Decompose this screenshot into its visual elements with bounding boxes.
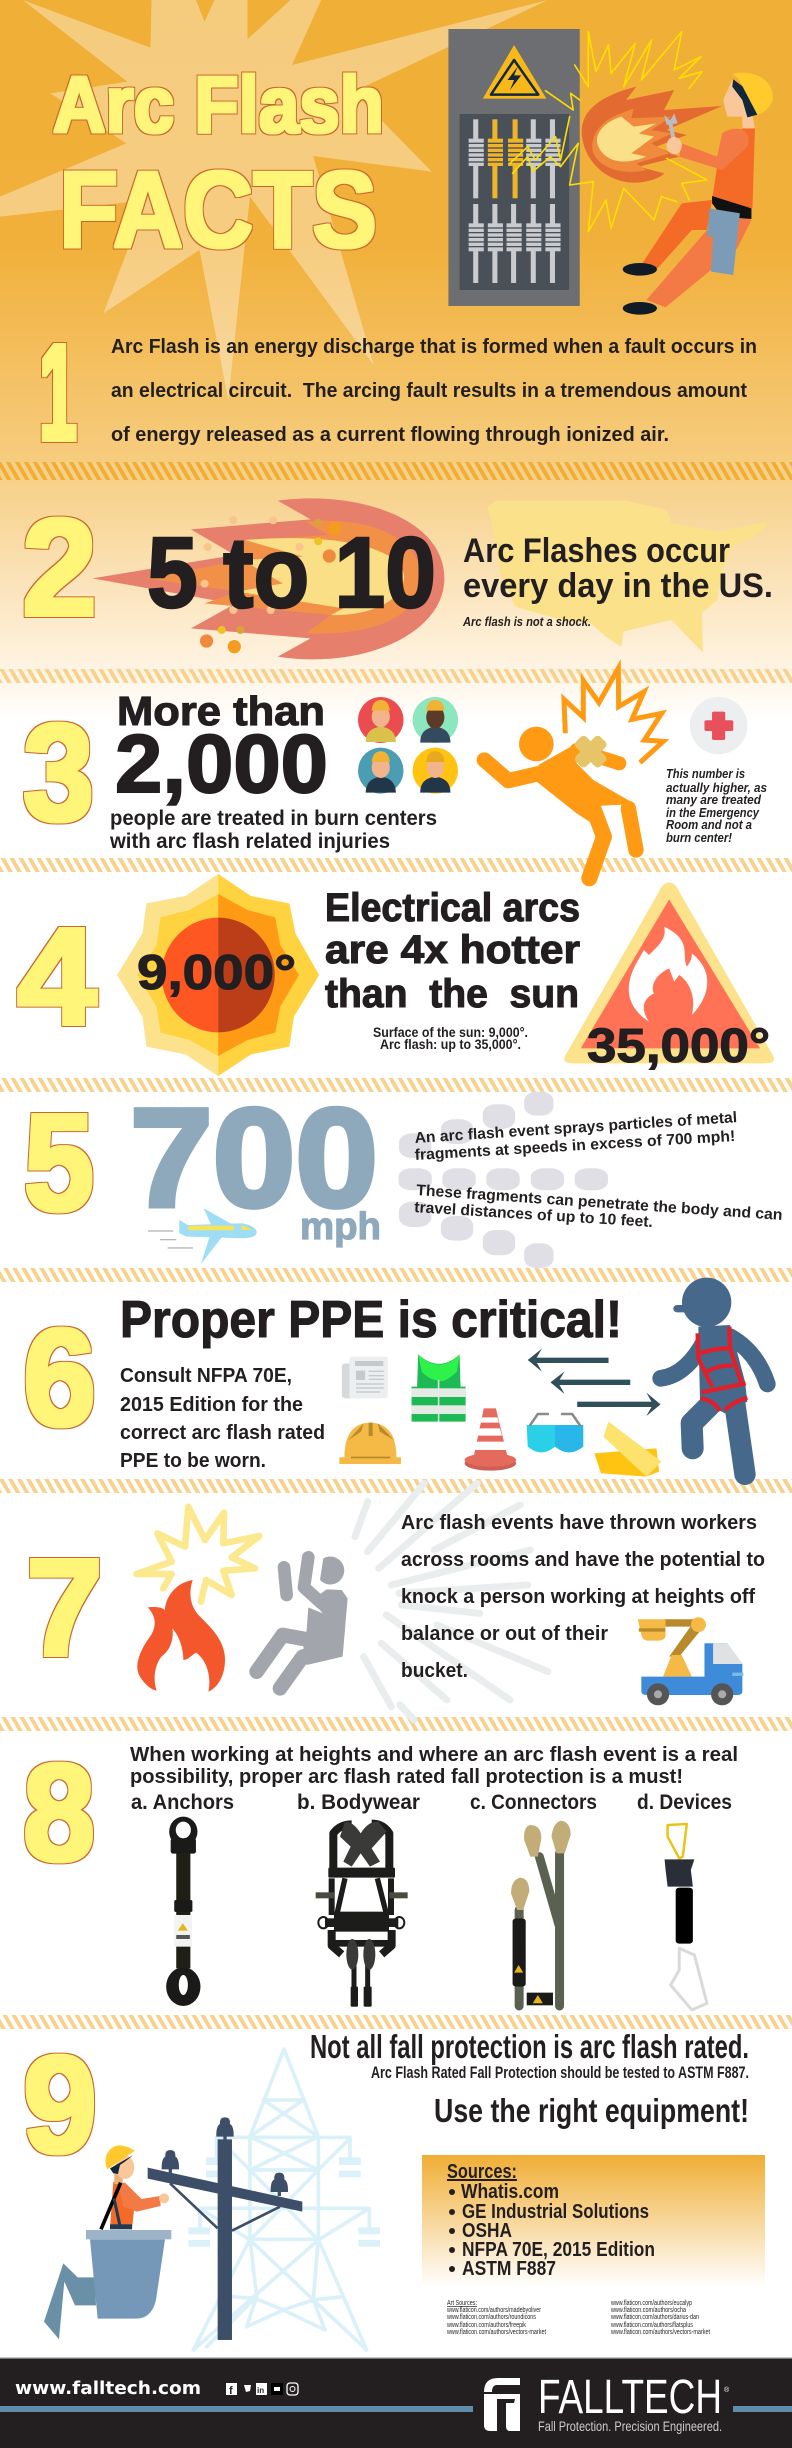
fact 7 text: knock a person working at heights off — [401, 1586, 755, 1608]
switches — [469, 119, 561, 283]
art sources: www.flaticon.com/authors/roundicons — [446, 2314, 536, 2321]
icon: warning triangle — [483, 45, 546, 99]
number 4: 4 — [17, 900, 97, 1054]
number 9: 9 — [23, 2028, 97, 2182]
icon: sun — [117, 874, 319, 1076]
fact 5 text: These fragments can penetrate the body and can — [416, 1182, 783, 1224]
icon: injured person — [484, 662, 668, 878]
panel: sources: GE Industrial Solutions — [462, 2201, 649, 2223]
icon: transmission tower — [188, 2049, 380, 2350]
speed statistic: mph — [300, 1206, 381, 1248]
fact 3 text: 2,000 — [115, 717, 328, 810]
side note — [666, 766, 767, 845]
icon: worker in bucket — [44, 2145, 171, 2339]
title: Arc Flash — [53, 60, 384, 149]
impact rays — [355, 1483, 548, 1720]
sun temperature: 9,000° — [137, 946, 296, 1000]
side note: many are treated — [666, 792, 762, 807]
footer — [0, 2357, 792, 2448]
icon: anchor strap — [166, 1817, 200, 2006]
equipment labels: b. Bodywear — [297, 1791, 420, 1814]
fact 7 text: bucket. — [401, 1660, 468, 1682]
fact 6 text — [120, 1291, 622, 1472]
fact 6 text: correct arc flash rated — [120, 1422, 325, 1444]
fact 4 text: are 4x hotter — [325, 928, 580, 972]
fact 2 text — [462, 532, 773, 629]
equipment labels: c. Connectors — [470, 1791, 597, 1814]
social icons: f — [229, 2385, 233, 2397]
number 6: 6 — [23, 1301, 96, 1455]
fact 6 text: PPE to be worn. — [120, 1450, 266, 1472]
fact 8 text: possibility, proper arc flash rated fall protection is a must! — [130, 1766, 683, 1788]
side note: This number is — [666, 766, 745, 781]
icon: utility pole — [148, 2117, 302, 2340]
icon: red cross — [690, 697, 747, 754]
art sources: Art Sources: — [447, 2300, 477, 2307]
art sources: www.flaticon.com/authors/vectors-market — [610, 2329, 710, 2336]
map of the US — [487, 501, 768, 653]
fact 1 text — [111, 336, 757, 446]
fact 6 text: Consult NFPA 70E, — [120, 1365, 292, 1387]
icon: thrown worker — [257, 1556, 348, 1688]
side note: in the Emergency — [666, 805, 760, 820]
statistic: 5 to 10: 5 to 10 — [147, 517, 436, 629]
equipment labels: d. Devices — [637, 1791, 732, 1814]
icon: fire warning triangle — [564, 883, 774, 1063]
equipment labels: a. Anchors — [131, 1791, 234, 1814]
logo wordmark — [538, 2371, 730, 2434]
icon: worker in harness — [661, 1278, 767, 1474]
title — [53, 60, 384, 271]
fact 8 text: When working at heights and where an arc flash event is a real — [130, 1744, 738, 1766]
social icons — [226, 2383, 298, 2397]
fact 1 text: Arc Flash is an energy discharge that is formed when a fault occurs in — [111, 336, 757, 358]
website: www.falltech.com — [15, 2378, 201, 2399]
speed statistic: 700 — [130, 1079, 378, 1236]
logo wordmark: ® — [724, 2386, 730, 2394]
fact 3 text — [109, 688, 437, 853]
icon: fall device — [665, 1824, 707, 2010]
icons: PPE equipment — [339, 1354, 662, 1477]
equipment labels — [131, 1791, 732, 1814]
logo wordmark: Fall Protection. Precision Engineered. — [538, 2418, 722, 2434]
art sources: www.flaticon.com/authors/ocha — [610, 2307, 686, 2314]
arc flash flame and lightning — [510, 32, 722, 232]
side note: Room and not a — [666, 817, 752, 832]
icon: harness — [316, 1822, 408, 2007]
fact 4 text: than the sun — [325, 972, 579, 1016]
fact 7 text — [401, 1512, 765, 1682]
fact 6 text: 2015 Edition for the — [120, 1394, 303, 1416]
icon: flame — [137, 1580, 225, 1692]
fact 2 text: Arc flash is not a shock. — [462, 614, 591, 629]
panel: sources: OSHA — [462, 2220, 512, 2242]
fact 4 text: Electrical arcs — [325, 886, 580, 930]
panel: sources — [422, 2155, 765, 2287]
fact 7 text: across rooms and have the potential to — [401, 1549, 765, 1571]
logo wordmark: FALLTECH — [538, 2371, 722, 2424]
number 7: 7 — [26, 1531, 103, 1685]
particle dots — [398, 1092, 608, 1268]
fact 9 text — [310, 2028, 749, 2129]
fact 4 text — [325, 886, 580, 1052]
art sources — [446, 2300, 710, 2336]
logo mark — [484, 2378, 520, 2431]
fact 5 text — [414, 1109, 783, 1231]
fact 2 text: Arc Flashes occur — [463, 532, 730, 570]
fact 8 text — [130, 1744, 738, 1788]
panel: sources: ASTM F887 — [462, 2258, 556, 2280]
arc flash temperature: 35,000° — [587, 1020, 770, 1073]
fact 5 text: fragments at speeds in excess of 700 mph! — [414, 1128, 736, 1164]
fact 3 text: More than — [117, 688, 325, 734]
fact 5 text: travel distances of up to 10 feet. — [414, 1199, 653, 1231]
fact 7 text: balance or out of their — [401, 1623, 608, 1645]
electrician worker — [623, 73, 773, 315]
art sources: www.flaticon.com/authors/freepik — [446, 2322, 526, 2329]
fact 4 text: Surface of the sun: 9,000°. — [373, 1024, 528, 1040]
icon: connector lanyard — [511, 1821, 571, 2006]
icon: four workers — [358, 697, 458, 794]
art sources: www.flaticon.com/authors/darius-dan — [610, 2314, 699, 2321]
fact 4 text: Arc flash: up to 35,000°. — [380, 1036, 521, 1052]
art sources: www.flaticon.com/authors/madebyoliver — [446, 2307, 542, 2314]
art sources: www.flaticon.com/authors/flatsplus — [610, 2322, 693, 2329]
social icons: in — [257, 2386, 264, 2395]
starburst — [0, 0, 548, 400]
text: 1 — [40, 316, 76, 470]
icon: airplane — [148, 1208, 257, 1264]
icon: explosion burst — [137, 1507, 259, 1602]
icon: fireball — [92, 498, 444, 659]
art sources: www.flaticon.com/authors/eucalyp — [610, 2300, 692, 2307]
fact 5 text: An arc flash event sprays particles of metal — [414, 1109, 738, 1147]
fact 2 text: every day in the US. — [463, 567, 773, 605]
side note: burn center! — [666, 830, 733, 845]
panel: sources: Sources: — [447, 2161, 517, 2183]
fact 1 text: of energy released as a current flowing through ionized air. — [111, 424, 669, 446]
stripe dividers — [0, 462, 792, 2029]
fact 1 text: an electrical circuit. The arcing fault results in a tremendous amount — [111, 380, 747, 402]
fact 3 text: with arc flash related injuries — [109, 830, 390, 853]
number 2: 2 — [22, 491, 97, 645]
arrows — [528, 1349, 661, 1416]
icon: bucket truck — [638, 1617, 743, 1705]
electrical panel — [448, 29, 580, 306]
art sources: www.flaticon.com/authors/vectors-market — [446, 2329, 546, 2336]
panel: sources: Whatis.com — [461, 2181, 559, 2203]
number 5: 5 — [24, 1086, 94, 1240]
number 3: 3 — [23, 696, 94, 850]
fact 6 text: Proper PPE is critical! — [120, 1291, 622, 1349]
fact 7 text: Arc flash events have thrown workers — [401, 1512, 757, 1534]
panel: sources: NFPA 70E, 2015 Edition — [462, 2239, 655, 2261]
title: FACTS — [59, 149, 377, 271]
side note: actually higher, as — [666, 780, 767, 795]
fact 3 text: people are treated in burn centers — [110, 807, 437, 830]
number 8: 8 — [23, 1736, 95, 1890]
